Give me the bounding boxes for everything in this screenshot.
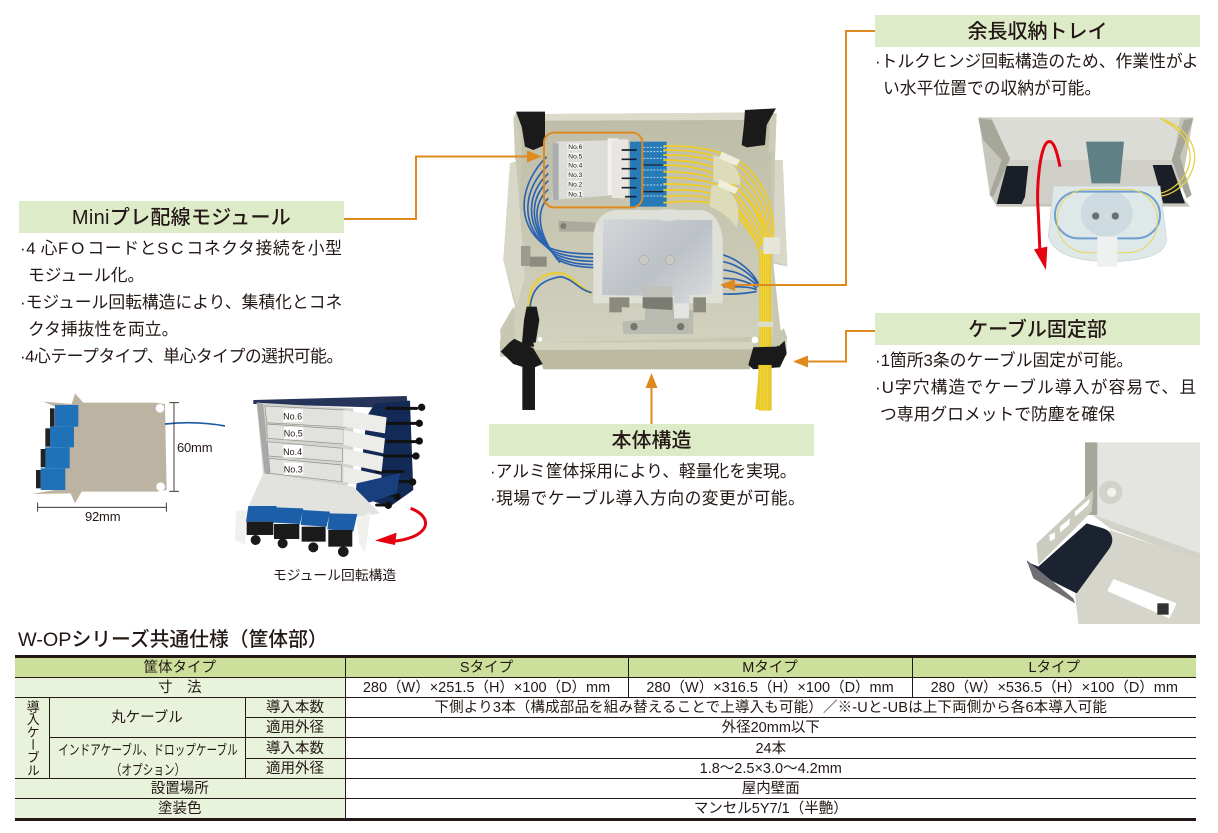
- specification table: 筐体タイプ: [144, 660, 216, 676]
- text: module features: ·モジュール回転構造により、集積化とコネ: [20, 293, 342, 312]
- specification table: 280（W）×251.5（H）×100（D）mm: [363, 680, 610, 696]
- text: body features: [490, 462, 805, 508]
- text: body features: ·アルミ筐体採用により、軽量化を実現。: [490, 462, 796, 481]
- text: tray features: い水平位置での収納が可能。: [883, 79, 1101, 98]
- specification table: 280（W）×536.5（H）×100（D）mm: [931, 680, 1178, 696]
- specification table: 適用外径: [266, 761, 324, 777]
- heading: cable fixing part: ケーブル固定部: [968, 319, 1107, 341]
- specification table: Sタイプ: [460, 660, 513, 676]
- specification table: Mタイプ: [742, 660, 798, 676]
- specification table: 下側より3本（構成部品を組み替えることで上導入も可能）／※-Uと-UBは上下両側から各6本導入可能: [434, 700, 1107, 716]
- specification table: 設置場所: [151, 781, 209, 797]
- text: tray features: ·トルクヒンジ回転構造のため、作業性がよ: [875, 52, 1199, 71]
- main photo: fiber enclosure: No.2: [568, 181, 583, 188]
- heading: Mini pre-wiring module: Miniプレ配線モジュール: [72, 207, 291, 229]
- text: module features: [20, 239, 343, 366]
- specification table: 寸 法: [158, 680, 202, 696]
- photo: module rotating structure: No.4: [283, 447, 302, 457]
- text: cable fixing features: つ専用グロメットで防塵を確保: [880, 405, 1115, 424]
- heading: body structure: [489, 424, 814, 456]
- specification table: Lタイプ: [1028, 660, 1080, 676]
- text: cable fixing features: ·U字穴構造でケーブル導入が容易で、且: [875, 378, 1197, 397]
- label: 60mm: 60mm: [177, 440, 212, 455]
- specification table: 屋内壁面: [742, 781, 800, 797]
- main photo: fiber enclosure: No.3: [568, 172, 583, 179]
- text: module features: ·4心テープタイプ、単心タイプの選択可能。: [20, 347, 343, 366]
- photo: module rotating structure: No.5: [284, 429, 303, 439]
- specification table: （オプション）: [110, 762, 185, 778]
- text: module features: ·4心FOコードとSCコネクタ接続を小型: [20, 239, 343, 258]
- photo: module rotating structure: No.6: [283, 411, 302, 421]
- specification table: 導入ケーブル: [25, 700, 40, 777]
- specification table: 丸ケーブル: [111, 710, 183, 726]
- text: module features: モジュール化。: [28, 266, 144, 285]
- specification table: 280（W）×316.5（H）×100（D）mm: [646, 680, 894, 696]
- heading: body structure: 本体構造: [612, 430, 692, 452]
- specification table: インドアケーブル、ドロップケーブル: [58, 742, 237, 758]
- heading: common specifications: W-OPシリーズ共通仕様（筐体部）: [18, 629, 328, 651]
- specification table: 導入本数: [266, 700, 324, 716]
- text: tray features: [875, 52, 1199, 98]
- heading: Mini pre-wiring module: [19, 201, 344, 233]
- main photo: fiber enclosure: No.4: [568, 163, 583, 170]
- label: 92mm: 92mm: [85, 509, 120, 524]
- main photo: fiber enclosure: No.1: [568, 191, 583, 198]
- main photo: fiber enclosure: No.6: [568, 144, 583, 151]
- specification table: 導入本数: [266, 740, 324, 756]
- specification table: 塗装色: [158, 801, 202, 817]
- text: cable fixing features: ·1箇所3条のケーブル固定が可能。: [875, 351, 1133, 370]
- text: body features: ·現場でケーブル導入方向の変更が可能。: [490, 489, 805, 508]
- text: module features: クタ挿抜性を両立。: [28, 320, 178, 339]
- text: cable fixing features: [875, 351, 1197, 424]
- specification table: [15, 655, 1196, 821]
- specification table: マンセル5Y7/1（半艶）: [694, 801, 848, 817]
- specification table: 外径20mm以下: [722, 720, 820, 736]
- heading: slack storage tray: [875, 15, 1200, 47]
- caption: module rotating structure: モジュール回転構造: [273, 568, 396, 583]
- heading: slack storage tray: 余長収納トレイ: [968, 21, 1108, 43]
- specification table: 適用外径: [266, 720, 324, 736]
- specification table: 1.8～2.5×3.0～4.2mm: [700, 761, 842, 777]
- main photo: fiber enclosure: No.5: [568, 153, 583, 160]
- specification table: 24本: [755, 740, 786, 756]
- heading: cable fixing part: [875, 313, 1200, 345]
- photo: module rotating structure: No.3: [284, 465, 303, 475]
